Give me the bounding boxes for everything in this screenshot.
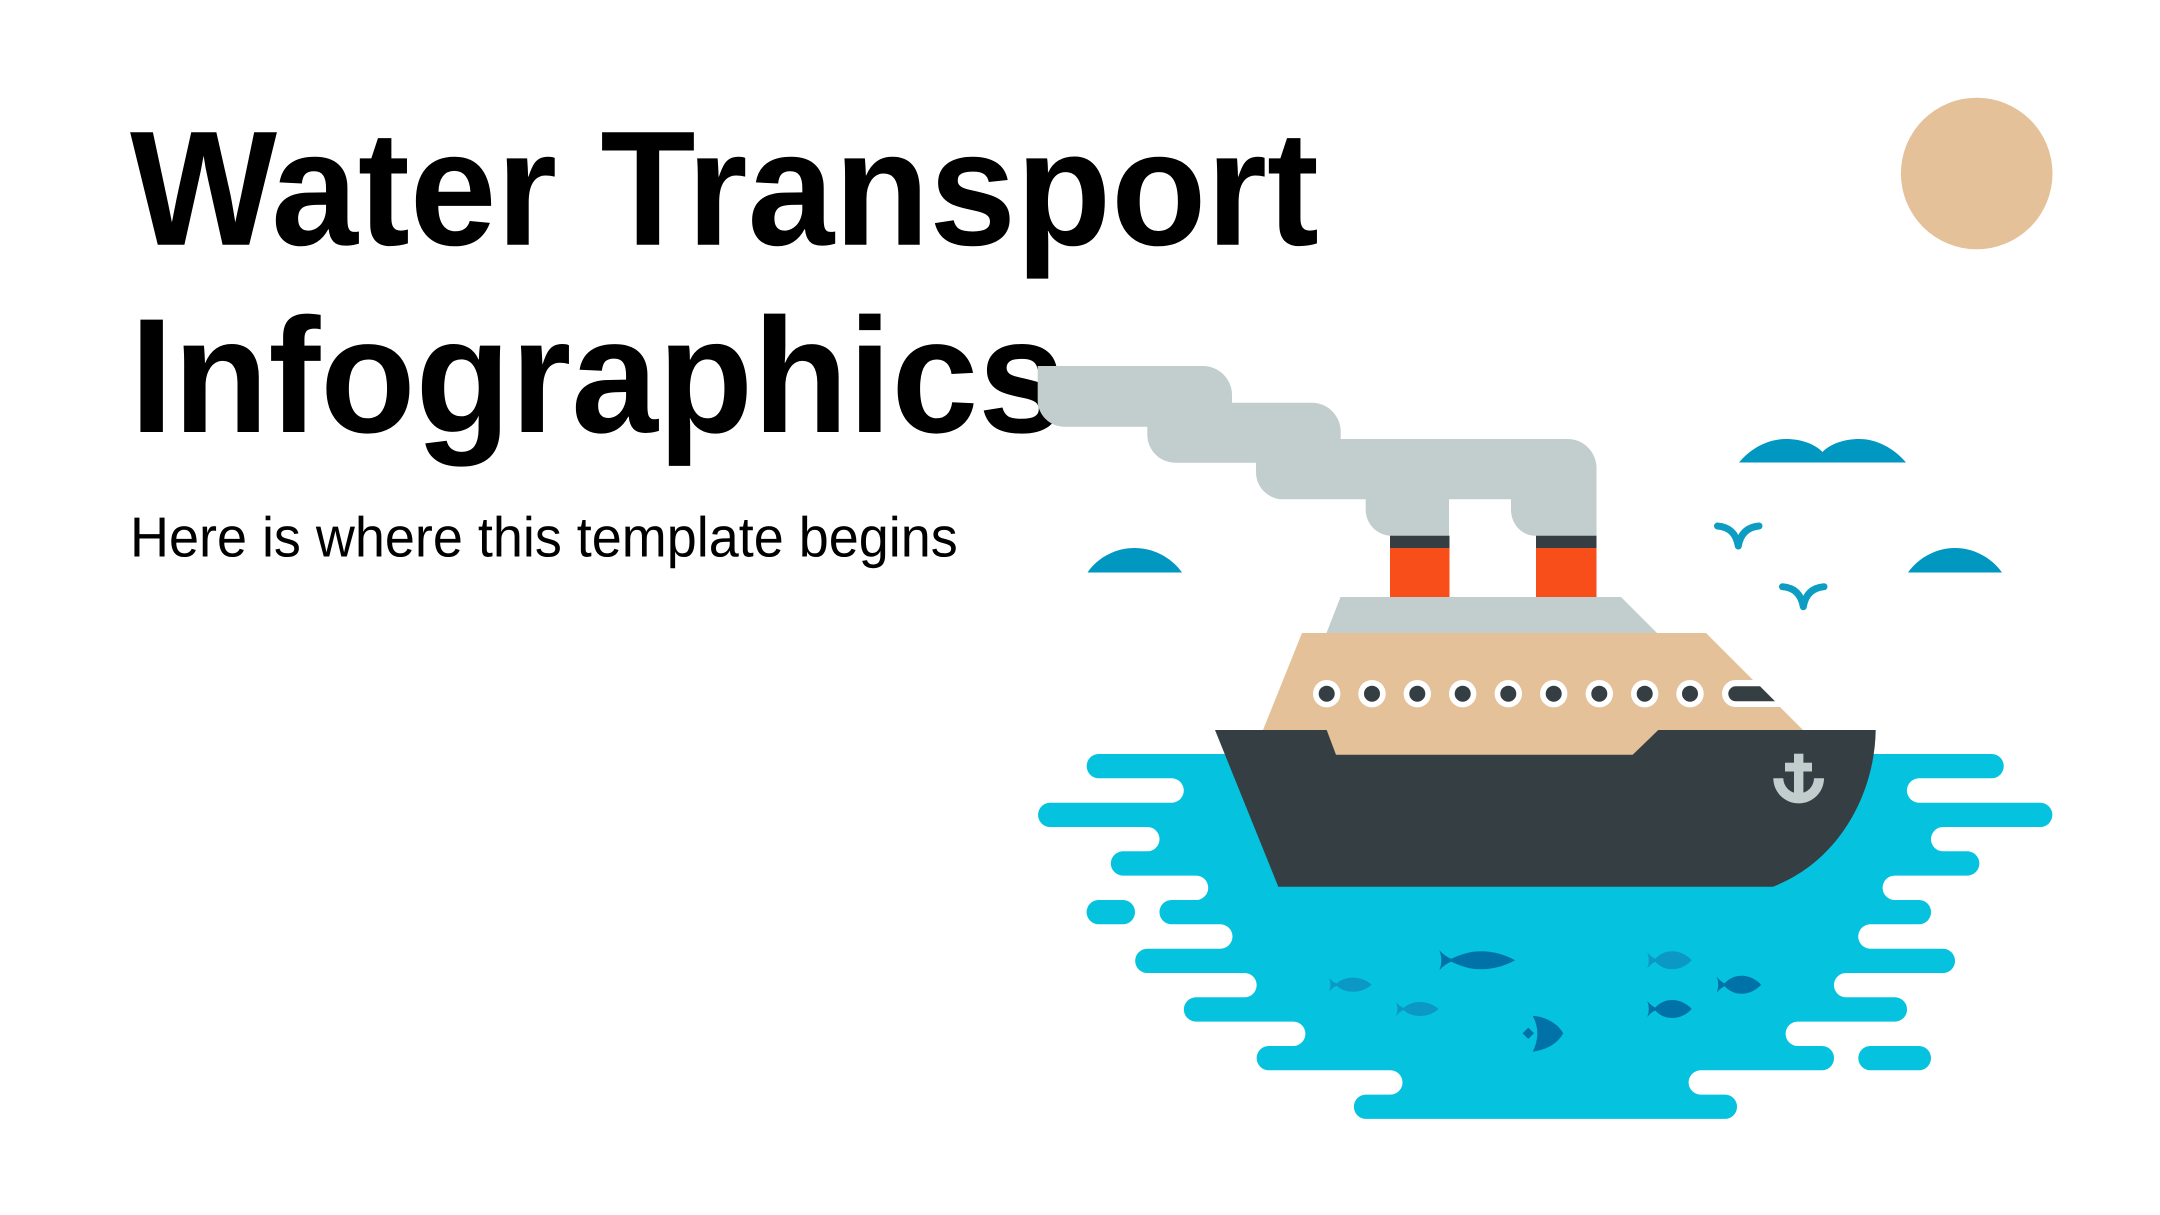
water droplet left (1087, 900, 1135, 924)
icon: right hill (1908, 548, 2002, 572)
illustration: ship (1215, 536, 1876, 887)
icon: bird one (1718, 526, 1759, 546)
illustration: birds (1718, 526, 1824, 607)
icon: angel fish (1523, 1016, 1563, 1052)
hull (1215, 730, 1876, 887)
cabin (1263, 633, 1803, 760)
icon: double hill (1739, 439, 1906, 462)
funnel right (1536, 536, 1596, 598)
icon: large fish (1439, 950, 1515, 970)
icon: dark fish lower (1647, 1000, 1692, 1018)
title: Infographics (130, 284, 1065, 467)
icon: bird two (1782, 587, 1824, 607)
water body (1038, 754, 2052, 1119)
bridge window (1722, 680, 1792, 707)
title: Water Transport (130, 97, 1319, 280)
funnel left (1390, 536, 1450, 598)
icon: anchor (1773, 754, 1824, 803)
icon: sun (1901, 98, 2052, 249)
upper deck (1326, 597, 1657, 633)
icon: dark fish right (1717, 976, 1761, 994)
icon: left hill (1088, 548, 1182, 572)
icon: light fish middle (1396, 1002, 1439, 1016)
icon: light fish top (1647, 951, 1692, 969)
subtitle: Here is where this template begins (130, 505, 958, 568)
illustration: smoke (1038, 366, 1596, 536)
illustration: fish (1329, 950, 1761, 1052)
illustration: hills (1088, 439, 2002, 572)
title (130, 97, 1319, 467)
icon: light fish left (1329, 978, 1372, 992)
illustration: water (1038, 754, 2052, 1119)
portholes (1313, 680, 1704, 707)
water droplet right (1858, 1046, 1931, 1070)
